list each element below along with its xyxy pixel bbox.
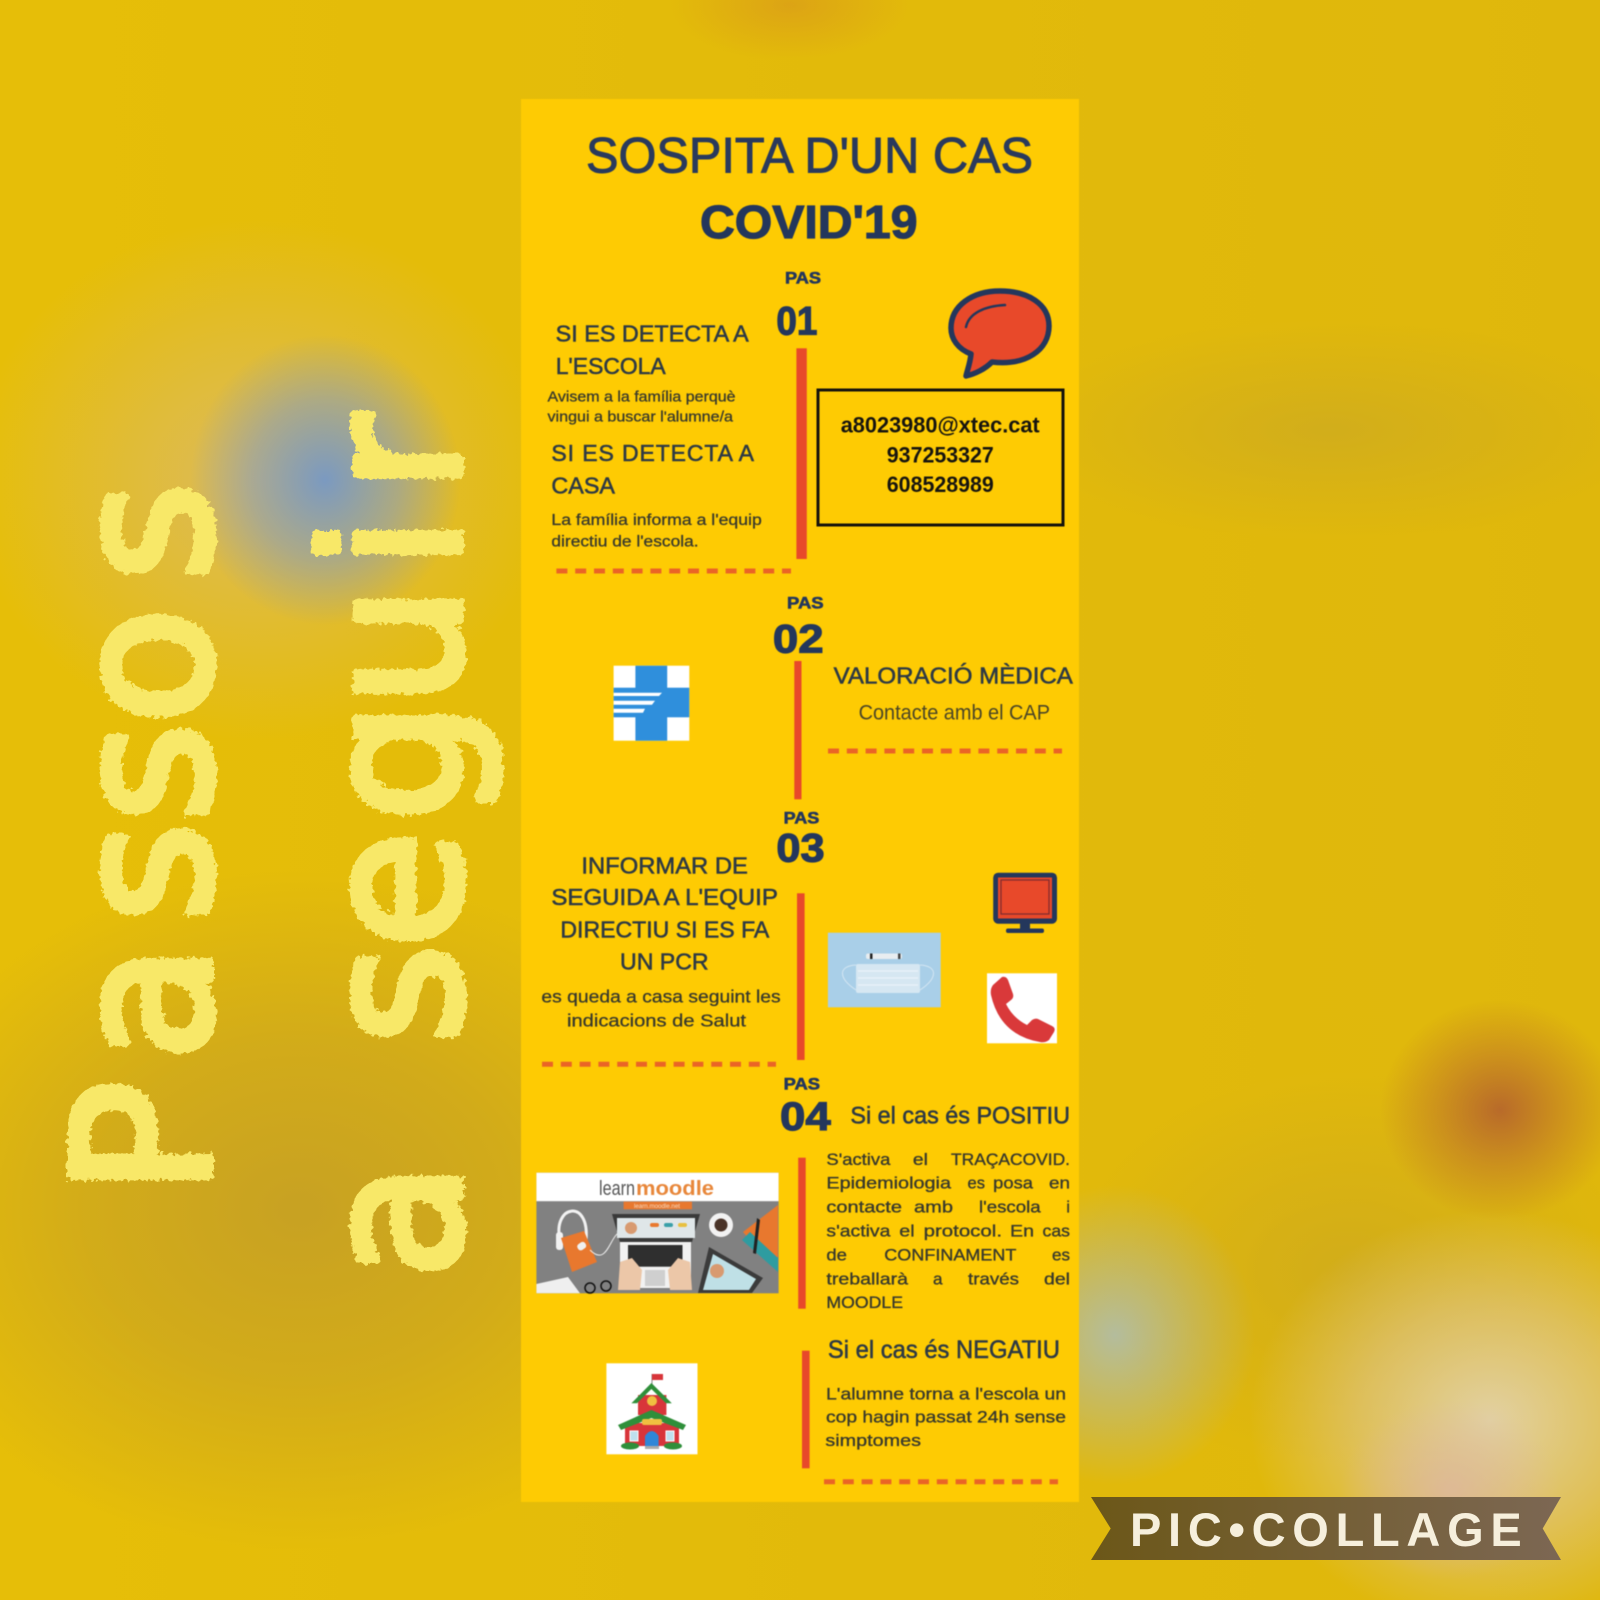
title: SOSPITA D'UN CAS xyxy=(586,128,1033,184)
step 3 label: PAS xyxy=(784,809,819,827)
step 2 timeline bar xyxy=(794,661,802,799)
image: learn moodle: learn xyxy=(599,1178,635,1200)
positive case paragraph: es xyxy=(968,1174,985,1193)
step 3 text: DIRECTIU SI ES FA xyxy=(560,916,770,942)
contact box xyxy=(818,390,1063,525)
positive case paragraph: el xyxy=(913,1150,928,1169)
divider 4 xyxy=(824,1479,1058,1484)
positive case paragraph xyxy=(826,1150,1070,1312)
positive case paragraph: contacte xyxy=(826,1198,902,1217)
positive case paragraph: protocol. xyxy=(924,1222,1002,1241)
step 3 text: INFORMAR DE xyxy=(581,852,748,878)
step 2 label xyxy=(773,595,824,662)
positive case paragraph: i xyxy=(1066,1198,1070,1217)
step 3 label: 03 xyxy=(776,827,825,871)
image: face mask and test tube xyxy=(828,933,941,1007)
step 1 text: school: Avisem a la família perquè xyxy=(548,390,736,406)
positive case paragraph: posa xyxy=(993,1174,1034,1193)
image: learn moodle xyxy=(536,1173,779,1293)
positive case paragraph: es xyxy=(1052,1245,1070,1264)
icon: school xyxy=(606,1363,698,1454)
step 1 text: home: La família informa a l'equip xyxy=(551,512,762,529)
step 1 label: PAS xyxy=(785,269,821,287)
heading: negative case: Si el cas és NEGATIU xyxy=(828,1336,1060,1364)
title xyxy=(586,128,1033,248)
positive case paragraph: cas xyxy=(1042,1222,1070,1241)
title: COVID'19 xyxy=(700,196,918,248)
positive case paragraph: CONFINAMENT xyxy=(884,1245,1016,1264)
watermark: PIC-COLLAGE banner: PIC•COLLAGE xyxy=(1130,1503,1522,1556)
image: learn moodle: moodle xyxy=(636,1178,714,1200)
icon: medical cross xyxy=(614,666,689,741)
negative case paragraph xyxy=(825,1384,1066,1450)
negative case timeline bar xyxy=(802,1351,810,1468)
step 1 label: 01 xyxy=(776,299,817,343)
step 3 text xyxy=(541,852,781,1031)
positive case paragraph: amb xyxy=(914,1198,953,1217)
step 1 text: home: directiu de l'escola. xyxy=(551,534,699,551)
positive case paragraph: Epidemiologia xyxy=(826,1174,952,1193)
step 3 text: es queda a casa seguint les xyxy=(541,987,781,1007)
step 4 label: 04 xyxy=(780,1095,832,1139)
step 1 text: school: vingui a buscar l'alumne/a xyxy=(548,410,734,426)
divider 2 xyxy=(828,748,1062,754)
negative case paragraph: simptomes xyxy=(825,1431,921,1450)
positive case paragraph: través xyxy=(968,1269,1019,1288)
positive case paragraph: treballarà xyxy=(826,1269,909,1288)
step 1 text: school: L'ESCOLA xyxy=(556,353,666,379)
step 2 text: VALORACIÓ MÈDICA xyxy=(834,662,1074,688)
side title: a seguir: a seguir xyxy=(284,413,505,1279)
step 1 label xyxy=(776,269,821,343)
positive case paragraph: el xyxy=(899,1222,915,1241)
step 3 timeline bar xyxy=(797,893,805,1060)
step 3 text: indicacions de Salut xyxy=(567,1011,746,1031)
positive case paragraph: de xyxy=(826,1245,847,1264)
positive case paragraph: a xyxy=(933,1269,943,1288)
side title: Passos: Passos xyxy=(34,482,255,1195)
positive case paragraph: l'escola xyxy=(979,1198,1041,1217)
step 4 label xyxy=(780,1075,832,1139)
icon: monitor xyxy=(993,873,1057,933)
step 2 text xyxy=(834,662,1074,724)
step 2 label: 02 xyxy=(773,618,824,662)
icon: speech bubble xyxy=(951,291,1049,376)
positive case paragraph: En xyxy=(1010,1222,1034,1241)
step 1 timeline bar xyxy=(796,348,807,559)
positive case paragraph: en xyxy=(1049,1174,1070,1193)
negative case paragraph: L'alumne torna a l'escola un xyxy=(826,1384,1066,1403)
panel: infographic xyxy=(521,99,1079,1502)
step 3 label xyxy=(776,809,825,871)
step 2 label: PAS xyxy=(787,595,824,613)
icon: telephone xyxy=(987,973,1057,1043)
step 1 text: school: SI ES DETECTA A xyxy=(556,320,749,346)
step 1 text: school xyxy=(548,320,749,426)
step 2 text: Contacte amb el CAP xyxy=(859,701,1050,724)
step 3 text: SEGUIDA A L'EQUIP xyxy=(551,884,778,910)
step 4 timeline bar xyxy=(798,1158,806,1309)
contact box: 937253327 xyxy=(887,443,994,468)
positive case paragraph: TRAÇACOVID. xyxy=(951,1150,1070,1169)
image: learn moodle: learn.moodle.net xyxy=(634,1203,680,1210)
negative case paragraph: cop hagin passat 24h sense xyxy=(826,1408,1066,1427)
contact box: a8023980@xtec.cat xyxy=(841,413,1040,438)
step 3 text: UN PCR xyxy=(620,948,709,974)
step 1 text: home: CASA xyxy=(551,472,616,498)
step 1 text: home xyxy=(551,440,762,551)
heading: positive case: Si el cas és POSITIU xyxy=(850,1102,1070,1129)
positive case paragraph: s'activa xyxy=(826,1222,891,1241)
contact box: 608528989 xyxy=(887,472,994,497)
divider 3 xyxy=(542,1062,776,1067)
positive case paragraph: S'activa xyxy=(826,1150,891,1169)
divider 1 xyxy=(556,568,791,574)
positive case paragraph: del xyxy=(1044,1269,1070,1288)
positive case paragraph: MOODLE xyxy=(826,1293,903,1312)
step 4 label: PAS xyxy=(784,1075,820,1093)
step 1 text: home: SI ES DETECTA A xyxy=(551,440,755,466)
